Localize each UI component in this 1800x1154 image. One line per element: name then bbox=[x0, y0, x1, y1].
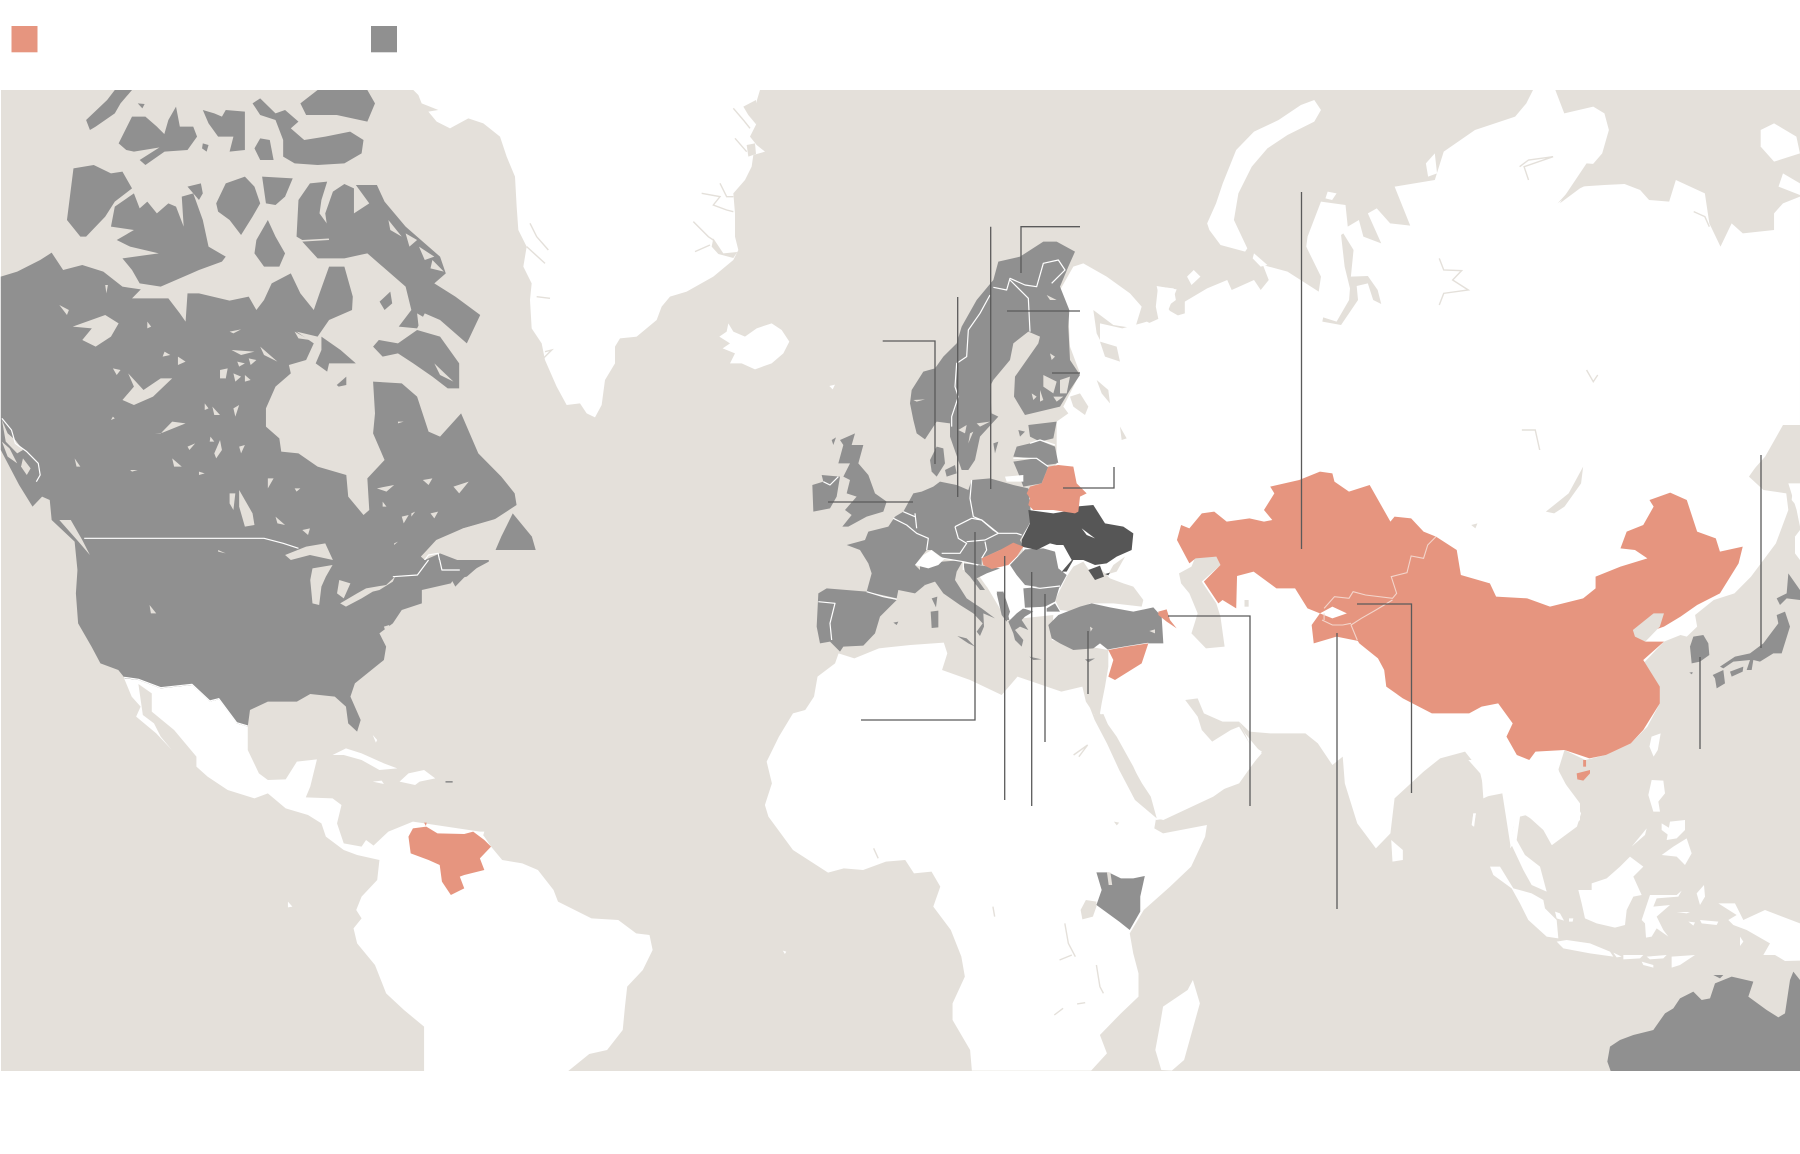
leader: Finland lower bbox=[1052, 372, 1080, 374]
Hungary bbox=[982, 543, 1023, 569]
Great Lakes bbox=[150, 565, 395, 637]
leader: Sweden bbox=[957, 297, 959, 497]
leader: Romania bbox=[1031, 572, 1033, 806]
salmon mass bbox=[1177, 472, 1743, 767]
leader: Turkey bbox=[1087, 631, 1089, 694]
leader: Kazakhstan bbox=[1300, 192, 1302, 549]
Kaliningrad bbox=[1005, 475, 1023, 482]
leader: north Europe bbox=[990, 227, 992, 489]
Canada mainland bbox=[1, 90, 536, 580]
Gray Balkans and Turkey bbox=[997, 548, 1163, 662]
country: Kenya bbox=[1096, 872, 1145, 930]
legend swatch: salmon bbox=[12, 26, 38, 52]
land: Mexico, Central and South America bbox=[124, 678, 653, 1071]
Switzerland bbox=[915, 550, 945, 568]
land: Kola and European Russia bbox=[1027, 263, 1180, 550]
Hainan bbox=[1577, 770, 1590, 781]
land: Asia bbox=[1150, 450, 1800, 862]
country group: Korea and Japan bbox=[1689, 573, 1800, 688]
leader: Japan bbox=[1760, 455, 1762, 648]
leader: Belarus bbox=[1063, 467, 1114, 488]
Canada lakes and inlets bbox=[2, 220, 497, 580]
white Sakhalin islands bbox=[1792, 483, 1800, 560]
leader: UK bbox=[828, 501, 913, 503]
leader: Tajikistan bbox=[1336, 633, 1338, 909]
leader: South Korea bbox=[1699, 657, 1701, 749]
Syria and Armenia bbox=[1108, 609, 1177, 680]
Ukraine bbox=[1022, 505, 1133, 580]
countries: Scandinavia, Baltics, UK and Ireland bbox=[812, 242, 1080, 527]
countries: Balkans, Turkey and Ukraine bbox=[997, 505, 1177, 680]
country: Venezuela bbox=[408, 823, 491, 895]
Belarus bbox=[1027, 465, 1087, 513]
countries: Central and Western Europe bbox=[817, 478, 1032, 652]
leader: Denmark bbox=[883, 341, 935, 464]
leader: Bulgaria bbox=[1044, 594, 1046, 742]
leader: Finland upper bbox=[1007, 310, 1080, 312]
land: Balkans bbox=[978, 567, 1023, 612]
Moldova bbox=[1048, 545, 1072, 572]
Bohai Sea bbox=[1633, 613, 1664, 642]
Belarus and Hungary bbox=[982, 465, 1087, 569]
country: Australia bbox=[1607, 972, 1800, 1071]
land: Greenland and Iceland bbox=[413, 90, 835, 417]
legend swatch: gray bbox=[371, 26, 397, 52]
leader lines bbox=[828, 192, 1761, 909]
land: Russia north bbox=[1100, 90, 1800, 530]
leader: Armenia bbox=[1168, 616, 1250, 806]
country: United States bbox=[76, 560, 489, 783]
country: Kazakhstan, Central Asia and China bbox=[1177, 472, 1743, 767]
leader: Hungary bbox=[1004, 556, 1006, 800]
land: Middle East and Eastern Europe bbox=[980, 500, 1280, 820]
leader: Kyrgyzstan bbox=[1357, 604, 1412, 793]
leader: Norway top bbox=[1021, 227, 1080, 273]
leader: Central Europe bbox=[861, 532, 975, 720]
Fergana valley bbox=[1320, 607, 1347, 618]
US-Canada border bbox=[2, 418, 459, 577]
legend bbox=[12, 26, 397, 52]
US mainland bbox=[76, 560, 489, 783]
land: Southeast Asia bbox=[1468, 760, 1800, 968]
Black Sea bbox=[1007, 557, 1143, 650]
Red Sea bbox=[1081, 702, 1157, 919]
land: Africa and Madagascar bbox=[765, 643, 1207, 1071]
country group: Canada bbox=[1, 90, 536, 580]
